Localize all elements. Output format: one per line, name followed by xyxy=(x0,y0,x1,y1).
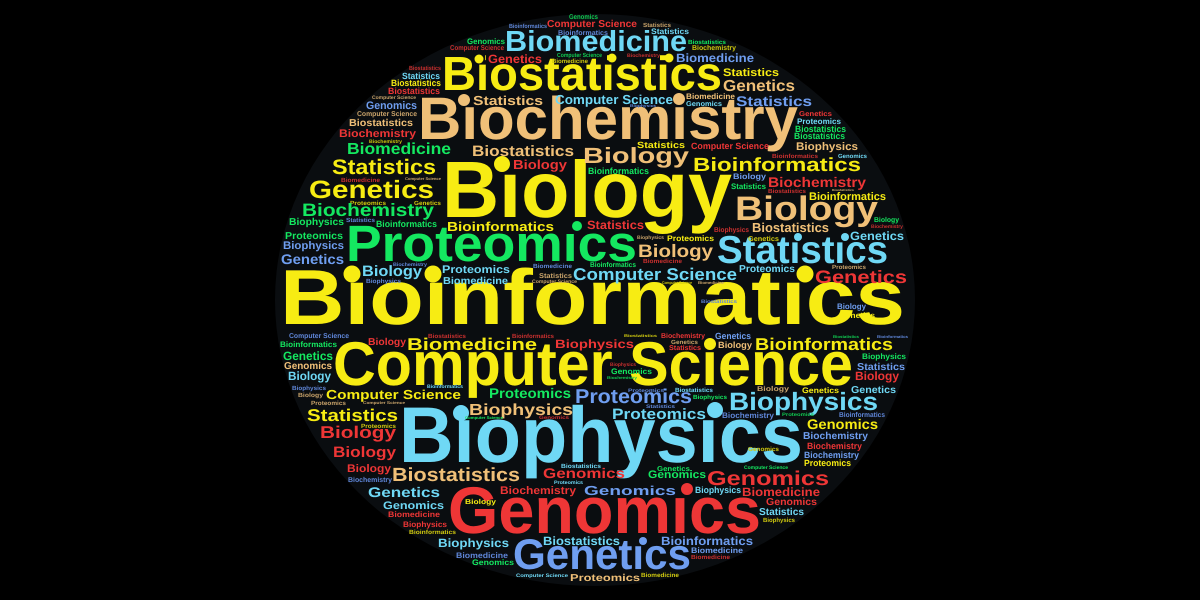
dark circle behind the word cloud xyxy=(275,14,915,586)
medium and small words: Biology xyxy=(733,172,767,181)
medium and small words: Computer Science xyxy=(555,92,673,107)
medium and small words: Biology xyxy=(513,157,568,172)
medium and small words: Biostatistics xyxy=(688,39,727,46)
medium and small words: Bioinformatics xyxy=(839,411,885,419)
word: Proteomics (large): Proteomics xyxy=(346,215,637,272)
medium and small words: Biochemistry xyxy=(393,262,427,268)
word: Biology (large): Biology xyxy=(442,145,732,234)
medium and small words: Biochemistry xyxy=(804,450,859,460)
medium and small words: Genomics xyxy=(807,416,878,432)
medium and small words: Biology xyxy=(837,302,867,311)
medium and small words: Biology xyxy=(347,463,392,475)
medium and small words: Genomics xyxy=(543,465,625,481)
medium and small words: Biochemistry xyxy=(803,431,868,442)
medium and small words: Biostatistics xyxy=(675,387,714,394)
medium and small words: Proteomics xyxy=(489,385,571,401)
medium and small words: Computer Science xyxy=(372,95,416,101)
medium and small words: Statistics xyxy=(637,140,685,150)
medium and small words: Biostatistics xyxy=(349,118,413,129)
medium and small words: Biostatistics xyxy=(391,78,441,88)
medium and small words: Biomedicine xyxy=(643,258,683,265)
round i-dots on the large words xyxy=(344,54,849,546)
medium and small words: Bioinformatics xyxy=(447,219,554,234)
medium and small words: Statistics xyxy=(539,272,572,280)
medium and small words: Biostatistics xyxy=(832,188,854,192)
medium and small words: Genomics xyxy=(686,100,722,108)
medium and small words: Biophysics xyxy=(555,337,634,351)
medium and small words: Genomics xyxy=(611,367,653,376)
medium and small words: Bioinformatics xyxy=(661,534,753,548)
medium and small words: Genomics xyxy=(838,153,868,160)
medium and small words: Biostatistics xyxy=(795,124,846,134)
medium and small words: Genetics xyxy=(488,52,542,66)
medium and small words: Bioinformatics xyxy=(509,23,548,30)
medium and small words: Biostatistics xyxy=(428,333,467,340)
medium and small words: Biology xyxy=(333,444,397,461)
medium and small words: Biostatistics xyxy=(472,143,574,160)
medium and small words: Genomics xyxy=(366,100,417,112)
medium and small words: Genomics xyxy=(472,558,515,567)
medium and small words: Bioinformatics xyxy=(427,384,463,390)
medium and small words: Biomedicine xyxy=(347,141,451,158)
medium and small words: Biochemistry xyxy=(627,53,660,59)
medium and small words: Computer Science xyxy=(450,44,504,52)
medium and small words: Biostatistics xyxy=(752,220,829,235)
medium and small words: Computer Science xyxy=(326,387,461,402)
medium and small words: Computer Science xyxy=(744,465,788,471)
medium and small words: Bioinformatics xyxy=(809,191,886,203)
medium and small words: Biology xyxy=(320,423,397,442)
medium and small words: Biochemistry xyxy=(692,44,736,52)
medium and small words: Genetics xyxy=(657,465,690,473)
medium and small words: Statistics xyxy=(473,93,543,108)
medium and small words: Biochemistry xyxy=(607,375,638,380)
medium and small words: Computer Science xyxy=(289,332,349,340)
medium and small words: Genetics xyxy=(283,349,333,363)
medium and small words: Biostatistics xyxy=(624,333,658,338)
medium and small words: Genomics xyxy=(383,500,444,512)
medium and small words: Bioinformatics xyxy=(512,333,555,340)
medium and small words: Biochemistry xyxy=(807,441,862,451)
medium and small words: Biomedicine xyxy=(691,554,731,561)
medium and small words: Computer Science xyxy=(357,110,417,118)
medium and small words: Biophysics xyxy=(292,385,327,392)
medium and small words: Bioinformatics xyxy=(590,261,636,269)
medium and small words: Genomics xyxy=(584,483,676,498)
medium and small words: Biomedicine xyxy=(676,51,754,65)
medium and small words: Computer Science xyxy=(465,415,504,420)
medium and small words: Proteomics xyxy=(350,200,387,207)
medium and small words: Biochemistry xyxy=(722,411,775,420)
medium and small words: Biology xyxy=(874,216,899,224)
medium and small words: Biology xyxy=(757,385,789,393)
medium and small words: Computer Science xyxy=(573,265,737,284)
medium and small words: Computer Science xyxy=(557,52,603,59)
medium and small words: Biomedicine xyxy=(698,280,725,285)
medium and small words: Biochemistry xyxy=(302,200,434,220)
word: Genetics (large): Genetics xyxy=(513,531,691,579)
medium and small words: Genetics xyxy=(715,331,751,341)
word: Biomedicine (large): Biomedicine xyxy=(505,26,687,58)
medium and small words: Statistics xyxy=(723,67,779,79)
medium and small words: Genomics xyxy=(648,469,706,481)
medium and small words: Proteomics xyxy=(311,400,347,407)
medium and small words: Biophysics xyxy=(289,217,344,228)
medium and small words: Genomics xyxy=(707,468,829,490)
medium and small words: Biology xyxy=(298,392,324,399)
medium and small words: Biology xyxy=(718,340,752,350)
medium and small words: Proteomics xyxy=(554,480,583,486)
medium and small words: Biology xyxy=(735,190,878,228)
medium and small words: Proteomics xyxy=(832,264,867,271)
medium and small words: Proteomics xyxy=(570,573,641,584)
medium and small words: Biophysics xyxy=(630,103,657,108)
medium and small words: Proteomics xyxy=(804,458,851,468)
word: Genomics (large): Genomics xyxy=(448,473,761,547)
medium and small words: Biophysics xyxy=(862,352,907,361)
medium and small words: Biophysics xyxy=(695,485,741,495)
medium and small words: Biophysics xyxy=(796,141,858,153)
word cloud xyxy=(280,13,909,584)
medium and small words: Computer Science xyxy=(363,400,406,405)
medium and small words: Computer Science xyxy=(516,573,568,579)
medium and small words: Biophysics xyxy=(469,402,573,419)
medium and small words: Genetics xyxy=(850,229,904,243)
medium and small words: Biomedicine xyxy=(686,92,736,101)
medium and small words: Statistics xyxy=(857,362,905,373)
medium and small words: Computer Science xyxy=(547,19,637,30)
medium and small words: Biostatistics xyxy=(701,299,737,305)
medium and small words: Biostatistics xyxy=(392,465,520,486)
medium and small words: Statistics xyxy=(669,344,701,352)
medium and small words: Biomedicine xyxy=(691,546,744,555)
medium and small words: Genetics xyxy=(815,267,907,287)
medium and small words: Biochemistry xyxy=(768,174,866,190)
medium and small words: Biophysics xyxy=(403,520,448,529)
medium and small words: Genetics xyxy=(802,386,840,395)
medium and small words: Bioinformatics xyxy=(877,334,909,339)
medium and small words: Statistics xyxy=(346,217,376,224)
medium and small words: Biostatistics xyxy=(409,65,442,72)
medium and small words: Biology xyxy=(362,263,423,280)
medium and small words: Biostatistics xyxy=(768,188,807,195)
medium and small words: Statistics xyxy=(651,27,690,36)
medium and small words: Biophysics xyxy=(637,235,664,241)
medium and small words: Biochemistry xyxy=(339,128,417,140)
word: Biochemistry (large): Biochemistry xyxy=(418,85,799,152)
medium and small words: Biophysics xyxy=(714,226,749,234)
medium and small words: Genomics xyxy=(539,415,569,421)
medium and small words: Computer Science xyxy=(691,141,769,151)
medium and small words: Genetics xyxy=(368,484,440,500)
medium and small words: Biophysics xyxy=(283,240,344,252)
medium and small words: Biostatistics xyxy=(543,534,620,548)
medium and small words: Biology xyxy=(638,241,713,261)
medium and small words: Bioinformatics xyxy=(772,153,819,160)
medium and small words: Biology xyxy=(465,498,496,506)
medium and small words: Biochemistry xyxy=(369,139,402,145)
medium and small words: Genomics xyxy=(284,361,332,372)
medium and small words: Biophysics xyxy=(366,278,402,285)
medium and small words: Genetics xyxy=(671,339,699,346)
medium and small words: Proteomics xyxy=(442,264,510,276)
medium and small words: Genetics xyxy=(414,200,442,207)
medium and small words: Biophysics xyxy=(693,394,728,401)
medium and small words: Biostatistics xyxy=(561,463,602,470)
medium and small words: Genomics xyxy=(569,13,598,21)
medium and small words: Statistics xyxy=(332,156,436,179)
medium and small words: Biophysics xyxy=(763,517,796,524)
medium and small words: Genomics xyxy=(467,37,506,46)
medium and small words: Biochemistry xyxy=(500,485,577,497)
medium and small words: Biomedicine xyxy=(641,572,680,579)
medium and small words: Bioinformatics xyxy=(280,340,338,349)
medium and small words: Genetics xyxy=(281,251,344,267)
medium and small words: Proteomics xyxy=(739,264,795,275)
medium and small words: Biology xyxy=(288,369,331,383)
medium and small words: Genomics xyxy=(766,497,817,508)
word: Biophysics (large): Biophysics xyxy=(399,390,803,479)
medium and small words: Biomedicine xyxy=(742,485,820,499)
medium and small words: Proteomics xyxy=(628,388,664,394)
medium and small words: Biochemistry xyxy=(871,224,903,230)
medium and small words: Bioinformatics xyxy=(693,155,861,176)
medium and small words xyxy=(280,13,909,584)
medium and small words: Proteomics xyxy=(667,234,715,243)
medium and small words: Biophysics xyxy=(438,536,509,550)
medium and small words: Biology xyxy=(368,337,406,348)
medium and small words: Statistics xyxy=(736,93,812,109)
medium and small words: Biomedicine xyxy=(341,177,381,184)
medium and small words: Biology xyxy=(855,369,899,383)
medium and small words: Bioinformatics xyxy=(588,166,649,176)
medium and small words: Biophysics xyxy=(610,362,636,368)
medium and small words: Biochemistry xyxy=(661,332,705,340)
medium and small words: Bioinformatics xyxy=(409,529,457,536)
medium and small words: Bioinformatics xyxy=(376,219,437,229)
medium and small words: Statistics xyxy=(731,182,767,191)
medium and small words: Computer Science xyxy=(405,176,442,181)
medium and small words: Genetics xyxy=(799,110,832,118)
word: Biostatistics (large): Biostatistics xyxy=(442,48,722,101)
medium and small words: Bioinformatics xyxy=(558,29,608,37)
medium and small words: Biostatistics xyxy=(388,86,440,96)
medium and small words: Proteomics xyxy=(612,406,706,423)
medium and small words: Genomics xyxy=(748,446,780,453)
medium and small words: Biology xyxy=(583,143,690,168)
medium and small words: Biomedicine xyxy=(533,263,573,270)
medium and small words: Genetics xyxy=(839,311,876,320)
medium and small words: Statistics xyxy=(643,22,672,29)
medium and small words: Proteomics xyxy=(782,412,814,418)
word: Bioinformatics (largest): Bioinformatics xyxy=(280,253,905,341)
medium and small words: Proteomics xyxy=(361,423,397,430)
medium and small words: Biostatistics xyxy=(794,131,845,141)
medium and small words: Bioinformatics xyxy=(755,335,893,354)
medium and small words: Proteomics xyxy=(797,117,842,126)
word: Computer Science (large): Computer Science xyxy=(333,330,853,399)
medium and small words: Biostatistics xyxy=(833,334,860,339)
medium and small words: Biomedicine xyxy=(388,510,441,519)
medium and small words: Genetics xyxy=(309,176,434,204)
medium and small words: Genetics xyxy=(723,78,795,95)
medium and small words: Statistics xyxy=(307,406,398,425)
medium and small words: Genetics xyxy=(851,385,896,396)
medium and small words: Proteomics xyxy=(285,231,343,242)
medium and small words: Biophysics xyxy=(729,388,878,416)
medium and small words: Proteomics xyxy=(575,386,692,408)
medium and small words: Biomedicine xyxy=(407,335,537,354)
medium and small words: Biomedicine xyxy=(552,58,589,65)
medium and small words: Statistics xyxy=(759,507,804,518)
medium and small words: Biomedicine xyxy=(443,276,508,287)
medium and small words: Computer Science xyxy=(662,280,693,285)
medium and small words: Statistics xyxy=(587,218,644,232)
word: Statistics (large): Statistics xyxy=(717,229,888,272)
medium and small words: Computer Science xyxy=(532,279,577,285)
medium and small words: Biochemistry xyxy=(348,476,392,484)
medium and small words: Statistics xyxy=(402,71,440,81)
medium and small words: Biomedicine xyxy=(456,551,509,560)
medium and small words: Statistics xyxy=(646,404,675,410)
medium and small words: Genetics xyxy=(748,235,779,243)
